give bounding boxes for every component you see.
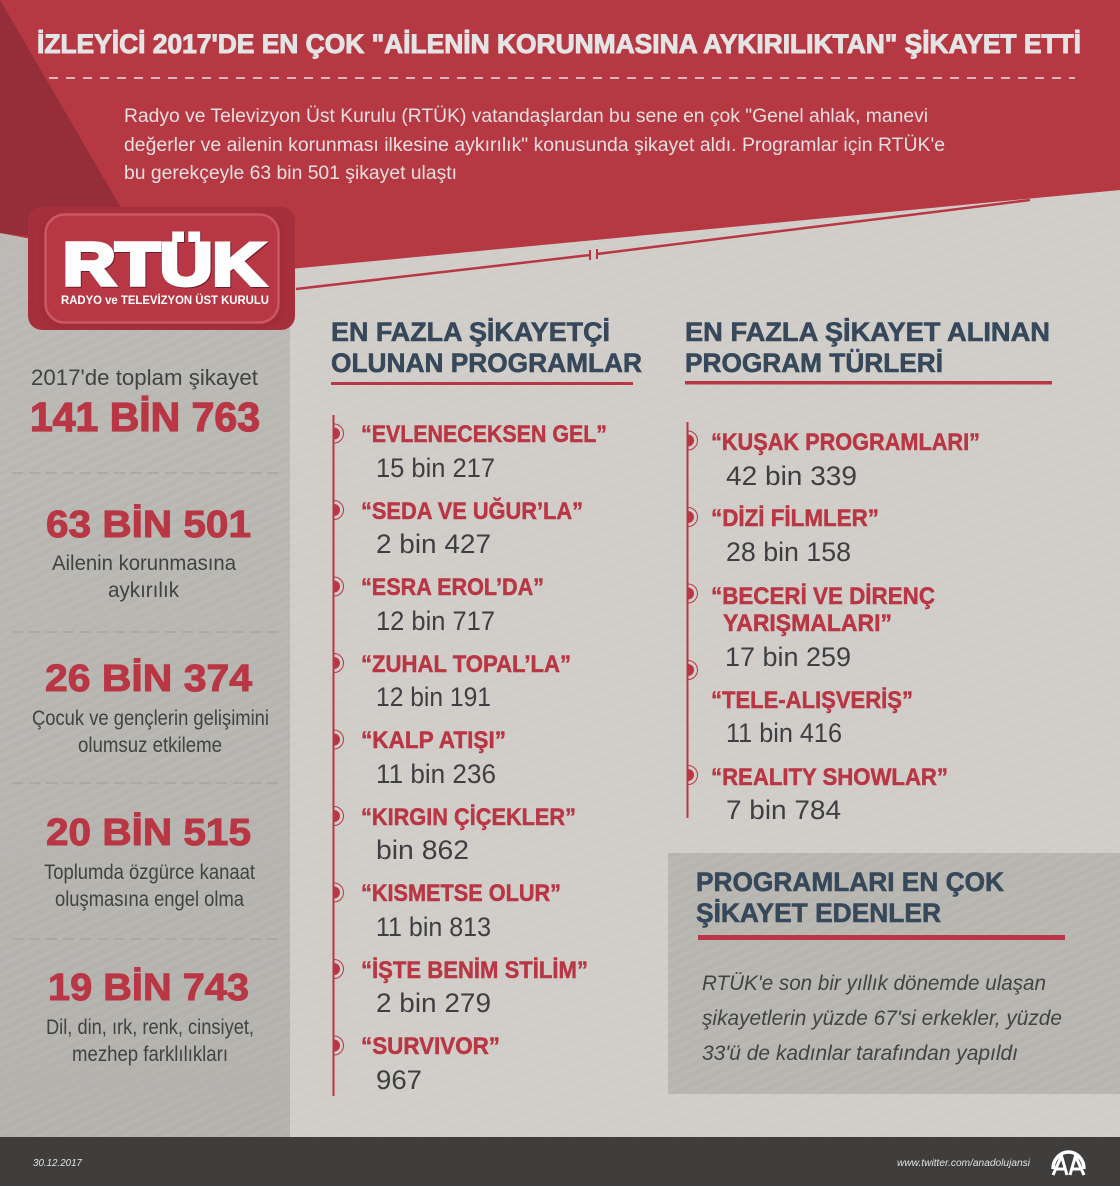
stat: 20 bin 515 xyxy=(44,812,255,911)
timeline: types xyxy=(688,422,698,818)
intro text: Radyo ve Televizyon Üst Kurulu (RTÜK) vatandaşlardan bu sene en çok "Genel ahlak, manevi xyxy=(124,106,928,127)
heading: programs: EN FAZLA ŞİKAYETÇİ xyxy=(331,317,610,347)
title: İZLEYİCİ 2017'DE EN ÇOK "AİLENİN KORUNMASINA AYKIRILIKTAN" ŞİKAYET ETTİ xyxy=(37,29,1081,59)
type list: 42 bin 339 xyxy=(726,461,857,491)
stat: 26 bin 374: Çocuk ve gençlerin gelişimini xyxy=(32,707,269,730)
program list xyxy=(361,421,607,1095)
logo: RTÜK: RTÜK xyxy=(63,231,265,298)
stat: 63 bin 501: Ailenin korunmasına xyxy=(52,552,236,575)
type list: 7 bin 784 xyxy=(726,795,841,825)
program list: 15 bin 217 xyxy=(376,453,495,483)
dark red triangle xyxy=(0,0,120,246)
panel: who complains xyxy=(668,853,1120,1094)
program list: “ESRA EROL’DA” xyxy=(361,574,544,601)
intro text xyxy=(124,106,945,184)
program list: 12 bin 191 xyxy=(376,682,491,712)
stat: 26 bin 374: olumsuz etkileme xyxy=(78,734,222,757)
stat: 26 bin 374 xyxy=(32,658,269,757)
stat: 63 bin 501: 63 BİN 501 xyxy=(46,504,251,546)
panel text: 33'ü de kadınlar tarafından yapıldı xyxy=(702,1042,1018,1065)
left panel background xyxy=(0,233,290,1137)
panel heading: ŞİKAYET EDENLER xyxy=(696,898,941,928)
total complaints: 2017'de toplam şikayet xyxy=(31,365,258,390)
type list: 17 bin 259 xyxy=(725,642,851,672)
heading: programs: OLUNAN PROGRAMLAR xyxy=(331,348,642,378)
stat: 26 bin 374: 26 BİN 374 xyxy=(45,658,252,700)
intro text: değerler ve ailenin korunması ilkesine aykırılık" konusunda şikayet aldı. Programlar için RTÜK'e xyxy=(124,135,945,156)
type list: 11 bin 416 xyxy=(726,718,842,748)
program list: “KISMETSE OLUR” xyxy=(361,880,561,907)
decorative line with gap xyxy=(296,200,1030,289)
program list: 967 xyxy=(376,1065,422,1095)
footer: www.twitter.com/anadolujansi xyxy=(897,1158,1031,1169)
program list: 2 bin 279 xyxy=(376,988,491,1018)
timeline: programs xyxy=(334,415,344,1096)
heading: program types xyxy=(685,317,1052,384)
type list: 28 bin 158 xyxy=(726,537,851,567)
total complaints: 141 BİN 763 xyxy=(30,394,260,440)
stat: 19 bin 743: Dil, din, ırk, renk, cinsiyet, xyxy=(46,1016,254,1039)
program list: bin 862 xyxy=(376,835,469,865)
type list: “TELE-ALIŞVERİŞ” xyxy=(711,687,913,714)
panel heading: PROGRAMLARI EN ÇOK xyxy=(696,867,1004,897)
program list: “EVLENECEKSEN GEL” xyxy=(361,421,607,448)
program list: “İŞTE BENİM STİLİM” xyxy=(361,957,588,984)
icon: AA logo xyxy=(1053,1152,1084,1175)
stat: 19 bin 743 xyxy=(46,967,254,1066)
program list: “SEDA VE UĞUR’LA” xyxy=(361,497,583,525)
heading: programs xyxy=(331,317,642,385)
logo: RTÜK: RTÜK xyxy=(64,232,266,299)
type list: “BECERİ VE DİRENÇ xyxy=(711,583,935,610)
stat: 20 bin 515: oluşmasına engel olma xyxy=(55,888,244,911)
stat: 19 bin 743: 19 BİN 743 xyxy=(48,967,249,1009)
stat: 19 bin 743: mezhep farklılıkları xyxy=(72,1043,228,1066)
program list: “KIRGIN ÇİÇEKLER” xyxy=(361,804,576,831)
panel text xyxy=(702,972,1062,1065)
type list: “DİZİ FİLMLER” xyxy=(711,505,879,532)
program list: 2 bin 427 xyxy=(376,529,491,559)
stat: 20 bin 515: Toplumda özgürce kanaat xyxy=(44,861,255,884)
footer xyxy=(0,1137,1120,1186)
heading: program types: EN FAZLA ŞİKAYET ALINAN xyxy=(685,317,1050,347)
stat: 63 bin 501 xyxy=(46,504,251,602)
program list: “KALP ATIŞI” xyxy=(361,727,506,754)
footer: 30.12.2017 xyxy=(33,1158,82,1169)
type list: YARIŞMALARI” xyxy=(723,610,892,637)
type list: “REALITY SHOWLAR” xyxy=(711,764,948,791)
logo: RTÜK xyxy=(28,207,295,330)
program list: 12 bin 717 xyxy=(376,606,495,636)
panel text: şikayetlerin yüzde 67'si erkekler, yüzde xyxy=(702,1007,1062,1030)
program list: 11 bin 813 xyxy=(376,912,491,942)
type list: “KUŞAK PROGRAMLARI” xyxy=(711,429,980,456)
program list: 11 bin 236 xyxy=(376,759,496,789)
stat: 63 bin 501: aykırılık xyxy=(108,579,179,602)
program list: “SURVIVOR” xyxy=(361,1033,500,1060)
type list xyxy=(711,429,980,825)
logo: RTÜK: RADYO ve TELEVİZYON ÜST KURULU xyxy=(61,294,269,307)
panel heading xyxy=(696,867,1065,940)
total complaints xyxy=(30,365,260,440)
heading: program types: PROGRAM TÜRLERİ xyxy=(685,348,943,378)
program list: “ZUHAL TOPAL’LA” xyxy=(361,651,571,678)
panel text: RTÜK'e son bir yıllık dönemde ulaşan xyxy=(702,972,1046,995)
stat: 20 bin 515: 20 BİN 515 xyxy=(46,812,251,854)
intro text: bu gerekçeyle 63 bin 501 şikayet ulaştı xyxy=(124,163,457,184)
red header shape xyxy=(0,0,1120,290)
